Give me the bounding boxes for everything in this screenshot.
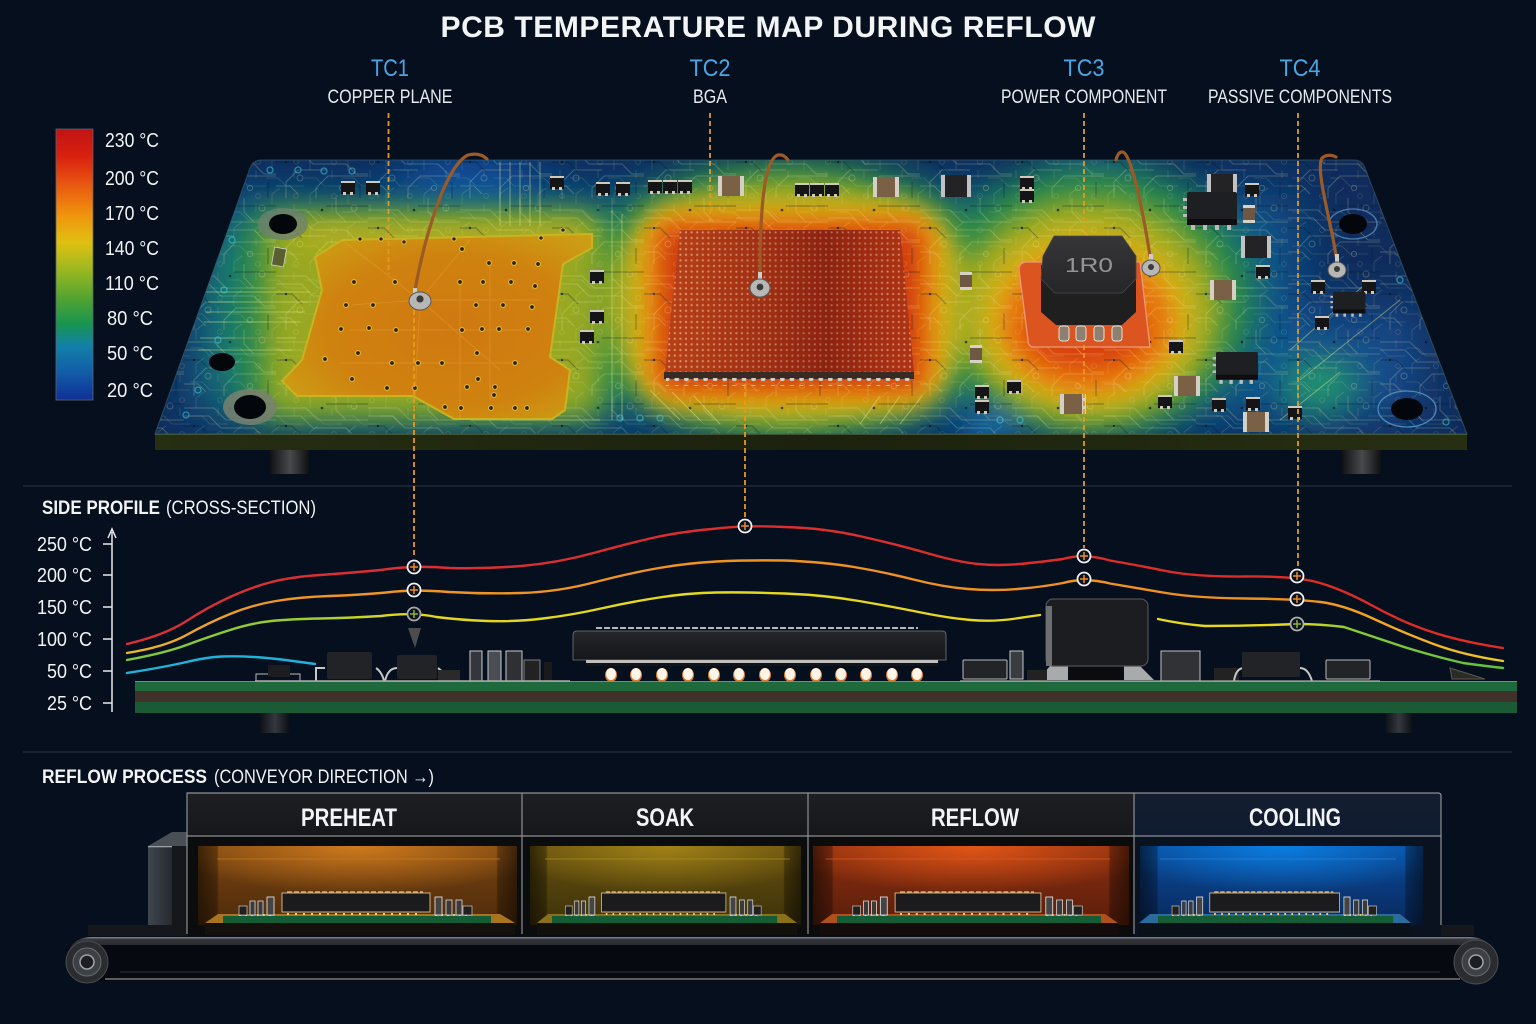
heat map surface [150, 155, 1470, 442]
zone: preheat: PREHEAT [301, 804, 397, 832]
scale labels: 200 °C [105, 168, 159, 190]
oven frame lines [187, 793, 1441, 934]
standoffs [270, 450, 1382, 474]
side profile temperature axis [37, 529, 116, 715]
board front edge [155, 433, 1467, 450]
axis labels: 50 °C [47, 661, 92, 683]
zone: reflow [808, 793, 1134, 936]
arrow: TC1 to board [408, 628, 421, 648]
TC dashed leader lines [388, 113, 1298, 568]
probe: TC1 wire [415, 154, 487, 290]
label: TC1 [328, 55, 452, 108]
zone: soak: SOAK [636, 804, 694, 832]
thermocouple labels [328, 55, 1392, 108]
curve: cyan ambient [127, 656, 315, 673]
zone: soak [522, 793, 808, 936]
probe rings [409, 254, 1346, 310]
label: TC4: TC4 [1280, 55, 1320, 82]
zone: cooling: COOLING [1249, 804, 1341, 832]
label: TC2: TC2 [690, 55, 730, 82]
colour bar [56, 129, 93, 400]
conveyor belt [66, 925, 1496, 981]
BGA side view [573, 628, 946, 682]
copper plane [282, 228, 592, 419]
scale labels: 20 °C [107, 380, 153, 402]
title: PCB TEMPERATURE MAP DURING REFLOW [440, 11, 1096, 44]
power inductor: 1R0 [1065, 255, 1113, 277]
probe: TC2 wire [760, 155, 788, 276]
heading: conveyor direction: (CONVEYOR DIRECTION →) [214, 767, 434, 788]
curve: red peak [127, 526, 1503, 648]
curve: yellow low [127, 592, 1040, 660]
surface mount components [272, 174, 1376, 432]
label: TC2 [690, 55, 730, 108]
trace bundles [198, 162, 1400, 424]
power inductor [1019, 236, 1150, 347]
axis labels: 200 °C [37, 565, 92, 587]
side profile temperature curves [127, 526, 1503, 673]
scale labels [105, 130, 159, 402]
heading: cross-section note: (CROSS-SECTION) [166, 498, 316, 519]
edge pads [183, 167, 1449, 425]
scale labels: 50 °C [107, 343, 153, 365]
axis line and ticks [103, 529, 116, 712]
scale labels: 140 °C [105, 238, 159, 260]
section dividers [23, 486, 1512, 752]
label: TC3: POWER COMPONENT [1001, 87, 1167, 108]
conveyor roller left [66, 941, 108, 983]
probe: TC3 wire [1116, 152, 1150, 256]
label: TC2: BGA [693, 87, 727, 108]
axis labels [37, 534, 92, 715]
zone: cooling [1134, 793, 1441, 936]
scale labels: 230 °C [105, 130, 159, 152]
axis labels: 150 °C [37, 597, 92, 619]
BGA package [664, 230, 914, 386]
heading: side profile: SIDE PROFILE [42, 498, 160, 519]
label: TC4: PASSIVE COMPONENTS [1208, 87, 1392, 108]
axis labels: 250 °C [37, 534, 92, 556]
label: TC1: TC1 [371, 55, 409, 82]
temperature colour scale legend [56, 129, 159, 402]
board layers [135, 681, 1517, 733]
probe: TC4 wire [1320, 155, 1336, 256]
label: TC3 [1001, 55, 1167, 108]
label: TC3: TC3 [1064, 55, 1104, 82]
scale labels: 110 °C [105, 273, 159, 295]
side cross-section PCB [135, 599, 1517, 733]
inductor side view [1038, 599, 1154, 680]
label: TC1: COPPER PLANE [328, 87, 452, 108]
axis labels: 25 °C [47, 693, 92, 715]
scale labels: 170 °C [105, 203, 159, 225]
curve: yellow low continued [1158, 619, 1503, 668]
mounting holes [209, 208, 1436, 427]
heading: reflow process: REFLOW PROCESS [42, 767, 207, 788]
left components [255, 651, 570, 681]
curve: orange mid [127, 560, 1503, 661]
reflow oven and conveyor [66, 793, 1498, 984]
PCB thermal map board [150, 152, 1470, 474]
label: TC4 [1208, 55, 1392, 108]
board outline [155, 160, 1467, 434]
zone: reflow: REFLOW [931, 804, 1019, 832]
curve markers [408, 520, 1304, 630]
right components [960, 651, 1485, 681]
conveyor roller right [1454, 940, 1498, 984]
oven entry block [148, 832, 187, 925]
scale labels: 80 °C [107, 308, 153, 330]
thermocouple probes [415, 152, 1336, 290]
axis labels: 100 °C [37, 629, 92, 651]
zone: preheat [187, 793, 522, 936]
